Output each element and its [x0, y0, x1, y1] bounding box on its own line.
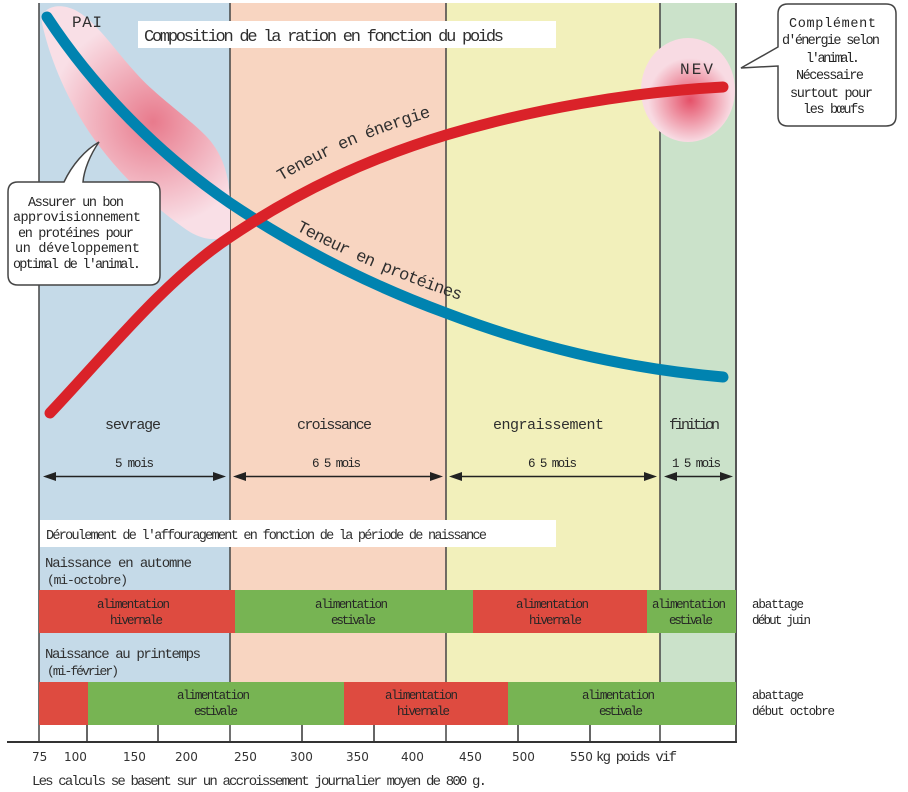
slaughter note: June: début juin — [752, 614, 811, 628]
callout: protein supply: optimal de l'animal. — [13, 258, 141, 273]
phase durations: 6 5 mois — [528, 457, 577, 471]
NEV highlight zone — [641, 38, 735, 142]
callout: energy supplement: surtout pour — [790, 87, 873, 102]
slaughter note: October — [752, 689, 835, 719]
label: PAI: PAI — [72, 14, 102, 32]
row: spring birth bars: estivale — [599, 705, 643, 719]
weight axis: 500 — [512, 750, 535, 764]
heading: feeding schedule: Déroulement de l'affouragement en fonction de la période de naissance — [46, 529, 487, 544]
label: protein curve: Teneur en protéines — [300, 220, 461, 299]
callout: energy supplement: l'animal. — [806, 52, 860, 67]
phase names: croissance — [297, 417, 372, 434]
panel: engraissement band — [446, 3, 660, 725]
weight axis: 300 — [290, 750, 313, 764]
label: energy curve: Teneur en énergie — [276, 108, 430, 179]
row: spring birth bars: estivale — [194, 705, 238, 719]
curve: energy content — [50, 87, 723, 413]
phase names — [105, 417, 720, 434]
row label: autumn birth: Naissance en automne — [45, 556, 192, 572]
row: autumn birth bars: estivale — [331, 614, 376, 628]
slaughter note: June: abattage — [752, 598, 804, 612]
row: autumn birth bars: hivernale — [529, 614, 582, 628]
footnote: Les calculs se basent sur un accroissement journalier moyen de 800 g. — [32, 774, 487, 790]
callout: energy supplement: Complément — [789, 17, 876, 32]
phase names: sevrage — [105, 417, 161, 434]
row label: spring birth: (mi-février) — [47, 664, 119, 679]
row label: autumn birth: (mi-octobre) — [47, 573, 128, 588]
row label: autumn birth — [45, 556, 192, 588]
panel: sevrage band — [39, 3, 230, 725]
panel: finition band — [660, 3, 736, 725]
callout: energy supplement: les bœufs — [803, 103, 865, 118]
callout: protein supply — [8, 142, 160, 285]
row: spring birth bars: hivernale — [397, 705, 450, 719]
callout: energy supplement — [741, 4, 896, 126]
callout: protein supply: Assurer un bon — [28, 196, 124, 211]
weight axis: 200 — [175, 750, 198, 764]
title: Composition de la ration en fonction du poids — [144, 28, 504, 47]
weight axis: 350 — [346, 750, 369, 764]
weight axis: 250 — [234, 750, 257, 764]
callout: energy supplement: Nécessaire — [796, 69, 864, 84]
phase names: engraissement — [493, 417, 604, 434]
weight axis: kg poids vif — [596, 750, 677, 766]
heading: feeding schedule — [40, 520, 556, 547]
weight axis: 100 — [64, 750, 87, 764]
weight axis: 150 — [123, 750, 146, 764]
row label: spring birth — [45, 647, 201, 679]
phase durations: 5 mois — [115, 457, 154, 471]
weight axis: 75 — [32, 750, 47, 764]
row: autumn birth bars: estivale — [669, 614, 713, 628]
phase durations — [115, 457, 721, 471]
row label: spring birth: Naissance au printemps — [45, 647, 201, 663]
row: autumn birth bars: alimentation — [516, 598, 589, 612]
callout: energy supplement: d'énergie selon — [782, 34, 880, 49]
curve: protein content — [47, 17, 723, 377]
callout: protein supply: approvisionnement — [13, 211, 141, 226]
title — [138, 21, 556, 48]
weight axis — [7, 725, 737, 766]
row: spring birth bars: alimentation — [385, 689, 458, 703]
row: autumn birth bars: alimentation — [97, 598, 170, 612]
row: spring birth bars: alimentation — [582, 689, 655, 703]
PAI highlight zone — [41, 6, 230, 239]
weight axis: 450 — [459, 750, 482, 764]
slaughter note: October: début octobre — [752, 705, 835, 719]
panel: croissance band — [230, 3, 446, 725]
row: autumn birth bars — [39, 590, 736, 633]
callout: protein supply: un développement — [15, 242, 140, 257]
slaughter note: June — [752, 598, 811, 628]
phase names: finition — [669, 417, 720, 434]
row: spring birth bars — [39, 682, 736, 725]
phase durations: 6 5 mois — [312, 457, 361, 471]
row: spring birth bars: alimentation — [177, 689, 250, 703]
label: NEV: NEV — [680, 61, 713, 79]
phase durations: 1 5 mois — [672, 457, 721, 471]
row: autumn birth bars: alimentation — [315, 598, 388, 612]
row: autumn birth bars: alimentation — [652, 598, 726, 612]
callout: protein supply: en protéines pour — [18, 227, 134, 242]
weight axis: 550 — [570, 750, 593, 764]
duration arrows — [43, 472, 733, 481]
row: autumn birth bars: hivernale — [110, 614, 163, 628]
slaughter note: October: abattage — [752, 689, 804, 703]
weight axis: 400 — [401, 750, 424, 764]
